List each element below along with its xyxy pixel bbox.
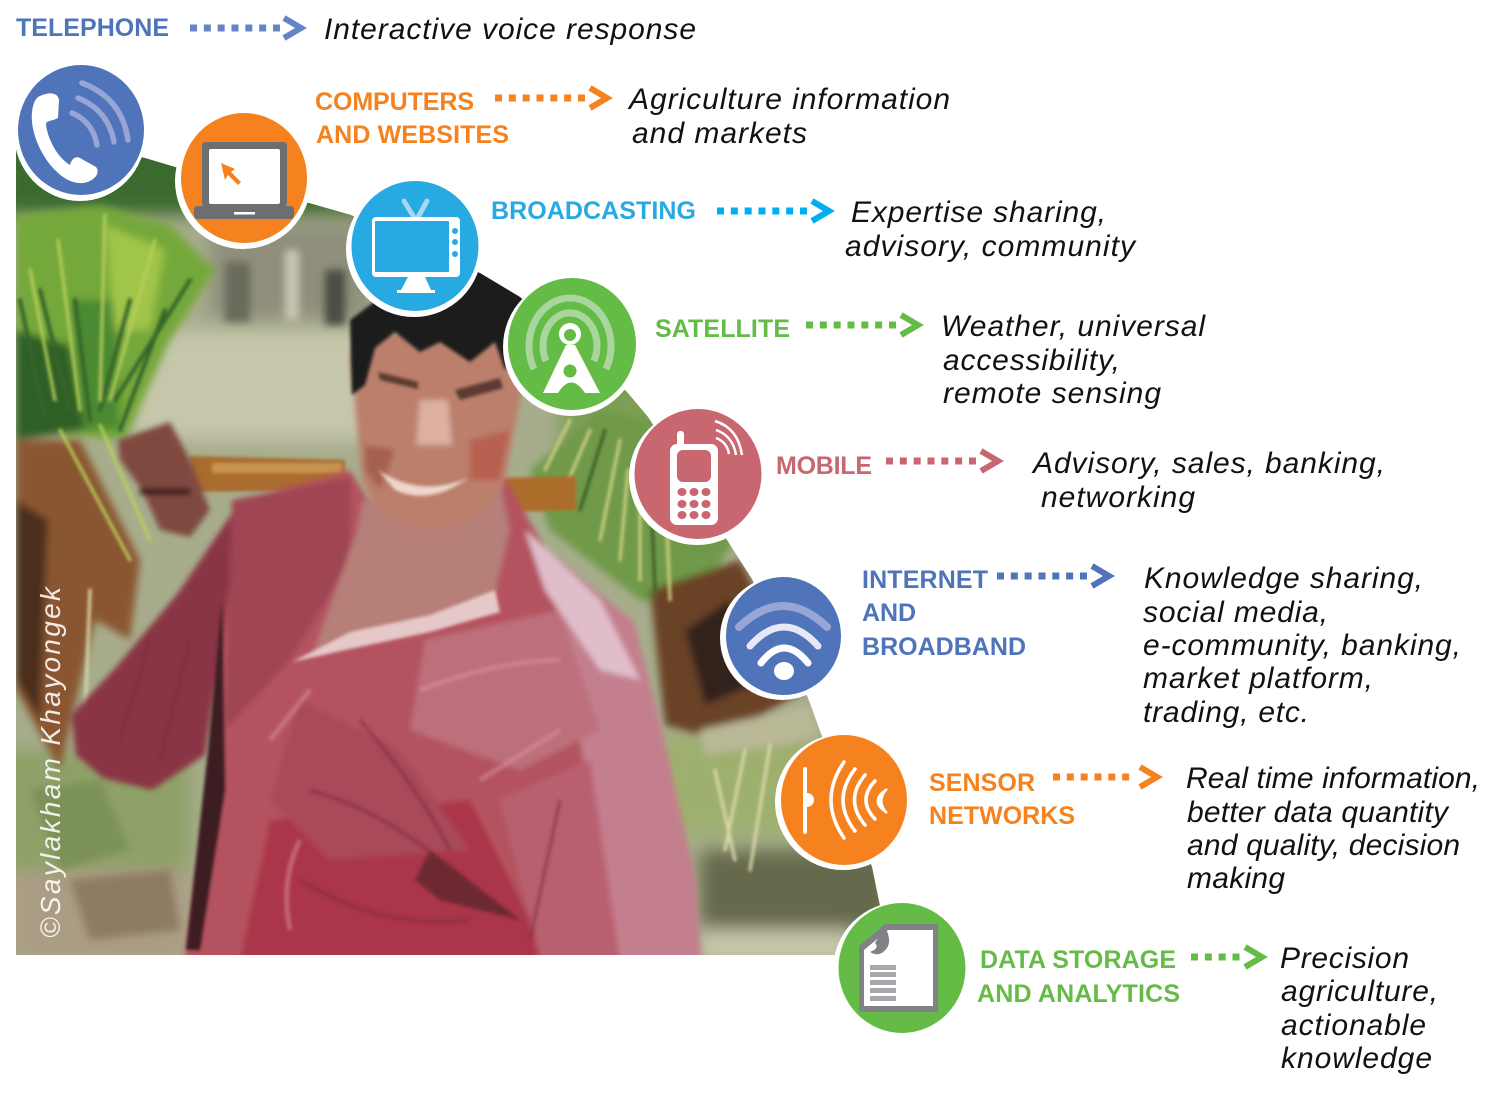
icon: television — [346, 181, 482, 317]
neck — [312, 480, 510, 655]
row: sensor networks — [775, 734, 1480, 895]
label: AND — [862, 599, 916, 627]
face — [350, 330, 521, 530]
facial features — [378, 372, 503, 496]
label — [315, 88, 509, 149]
label: INTERNET — [862, 566, 988, 594]
arrow — [495, 88, 607, 108]
description: accessibility, — [943, 344, 1120, 377]
description: market platform, — [1143, 662, 1373, 695]
description: remote sensing — [943, 377, 1161, 410]
description: Knowledge sharing, — [1144, 562, 1423, 595]
arrow — [717, 201, 829, 221]
icon: document — [833, 902, 969, 1038]
collar and shirt folds — [184, 588, 563, 952]
description: Real time information, — [1186, 762, 1480, 795]
description: knowledge — [1281, 1042, 1432, 1075]
label: NETWORKS — [929, 802, 1075, 830]
shirt — [71, 470, 702, 970]
description — [627, 83, 950, 150]
description: trading, etc. — [1143, 696, 1309, 729]
icon: mobile phone — [629, 409, 765, 545]
description: Expertise sharing, — [851, 196, 1106, 229]
icon: satellite tower — [503, 278, 639, 416]
icon: telephone — [14, 65, 146, 201]
description — [941, 310, 1206, 410]
description: and quality, decision — [1187, 829, 1460, 862]
label: SATELLITE — [655, 315, 790, 343]
label: DATA STORAGE — [980, 946, 1176, 974]
description: agriculture, — [1281, 975, 1438, 1008]
description — [845, 196, 1137, 263]
description: and markets — [632, 117, 807, 150]
icon: sensor waves — [775, 734, 911, 870]
arrow — [1191, 947, 1262, 967]
label: TELEPHONE — [16, 14, 169, 42]
label — [929, 769, 1075, 830]
description: actionable — [1281, 1009, 1426, 1042]
row: computers and websites — [175, 83, 950, 249]
description: Weather, universal — [941, 310, 1206, 343]
hand — [118, 422, 210, 537]
row: internet and broadband — [720, 562, 1461, 729]
description: Advisory, sales, banking, — [1031, 447, 1385, 480]
arrow — [886, 451, 998, 471]
description — [1143, 562, 1461, 729]
arrow — [806, 315, 918, 335]
description: advisory, community — [845, 230, 1137, 263]
row: satellite — [503, 278, 1206, 416]
label: AND ANALYTICS — [977, 980, 1180, 1008]
icon: laptop — [175, 113, 311, 249]
description: Agriculture information — [627, 83, 950, 116]
label — [862, 566, 1026, 661]
label: AND WEBSITES — [316, 121, 509, 149]
hair — [350, 270, 540, 395]
arrow — [190, 18, 301, 38]
description: Interactive voice response — [324, 13, 696, 46]
description: making — [1187, 862, 1285, 895]
photo: farmer carrying rice seedlings — [0, 130, 896, 970]
description: e-community, banking, — [1143, 629, 1461, 662]
photo credit: ©Saylakham Khayongek — [35, 585, 66, 938]
label — [977, 946, 1180, 1008]
description: networking — [1041, 481, 1195, 514]
description: better data quantity — [1187, 796, 1450, 829]
description — [1031, 447, 1385, 514]
row: broadcasting — [346, 181, 1137, 317]
label: SENSOR — [929, 769, 1035, 797]
description — [1280, 942, 1438, 1075]
icon: wifi — [720, 576, 844, 700]
row: telephone — [14, 13, 696, 201]
label: MOBILE — [776, 452, 872, 480]
description: social media, — [1143, 596, 1328, 629]
label: COMPUTERS — [315, 88, 474, 116]
pole — [190, 456, 576, 512]
arrow — [997, 566, 1109, 586]
row: mobile — [629, 409, 1385, 545]
arrow — [1053, 767, 1157, 787]
description — [1186, 762, 1480, 895]
row: data storage and analytics — [833, 902, 1438, 1075]
label: BROADBAND — [862, 633, 1026, 661]
label: BROADCASTING — [491, 197, 696, 225]
description: Precision — [1280, 942, 1409, 975]
